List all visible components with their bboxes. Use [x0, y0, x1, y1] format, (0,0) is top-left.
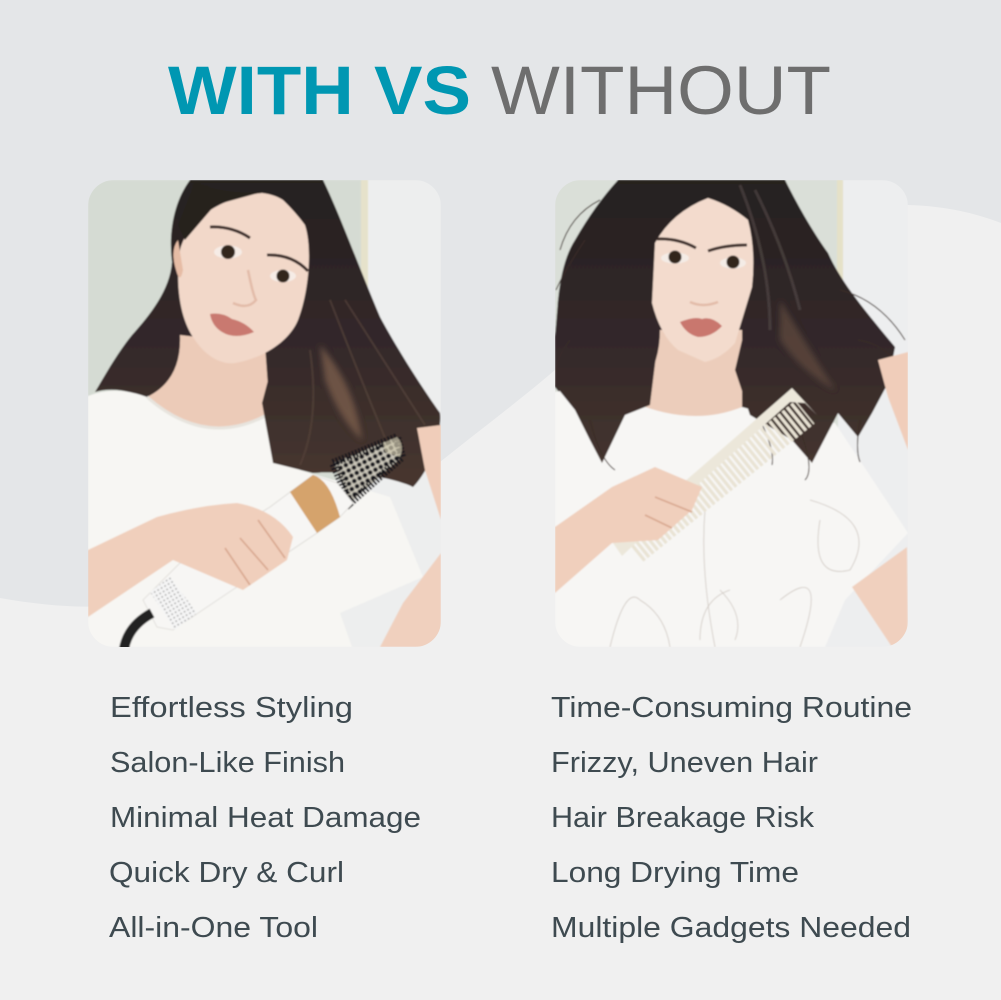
eyes and brows — [210, 227, 308, 282]
left arm and hand — [555, 467, 702, 593]
list: with: Quick Dry & Curl — [109, 857, 344, 889]
list: without: Long Drying Time — [551, 857, 799, 889]
right hand — [878, 352, 908, 450]
nose — [233, 270, 256, 306]
cord — [124, 613, 152, 649]
list: with: All-in-One Tool — [109, 912, 318, 944]
list: with: Minimal Heat Damage — [110, 802, 421, 834]
right hand — [417, 425, 441, 520]
photo: without the styling brush — [555, 180, 908, 647]
lips — [210, 314, 254, 336]
flyaway strands — [556, 200, 905, 480]
list: without: Multiple Gadgets Needed — [551, 912, 911, 944]
brush head — [333, 437, 402, 503]
vent — [150, 577, 197, 630]
list: with: Salon-Like Finish — [110, 747, 345, 779]
title — [168, 52, 831, 129]
face — [652, 198, 753, 362]
title: WITH VS — [168, 52, 471, 129]
right arm — [380, 553, 441, 647]
t-shirt — [88, 391, 423, 647]
frizzy hair over the t-shirt — [559, 361, 656, 464]
brush body — [143, 475, 353, 630]
neck — [147, 335, 270, 429]
right arm — [852, 547, 908, 647]
list: without: Hair Breakage Risk — [551, 802, 815, 834]
eyes and brows — [657, 239, 747, 268]
loose hairs on the t-shirt — [610, 500, 859, 647]
hair back — [555, 180, 894, 414]
photo: with the styling brush — [88, 180, 441, 649]
list: without: Time-Consuming Routine — [551, 692, 912, 724]
t-shirt — [555, 385, 908, 647]
comb — [613, 388, 817, 556]
nose — [690, 302, 718, 305]
neck — [645, 328, 744, 416]
title: WITHOUT — [491, 52, 831, 129]
hair front right — [258, 180, 440, 487]
left arm and hand — [88, 503, 293, 617]
copper band — [290, 475, 340, 533]
hair back — [95, 180, 440, 487]
lips — [680, 318, 722, 337]
list: without: Frizzy, Uneven Hair — [551, 747, 818, 779]
face — [178, 193, 309, 363]
list: without — [551, 692, 912, 944]
list: with — [109, 692, 421, 944]
list: with: Effortless Styling — [110, 692, 353, 724]
